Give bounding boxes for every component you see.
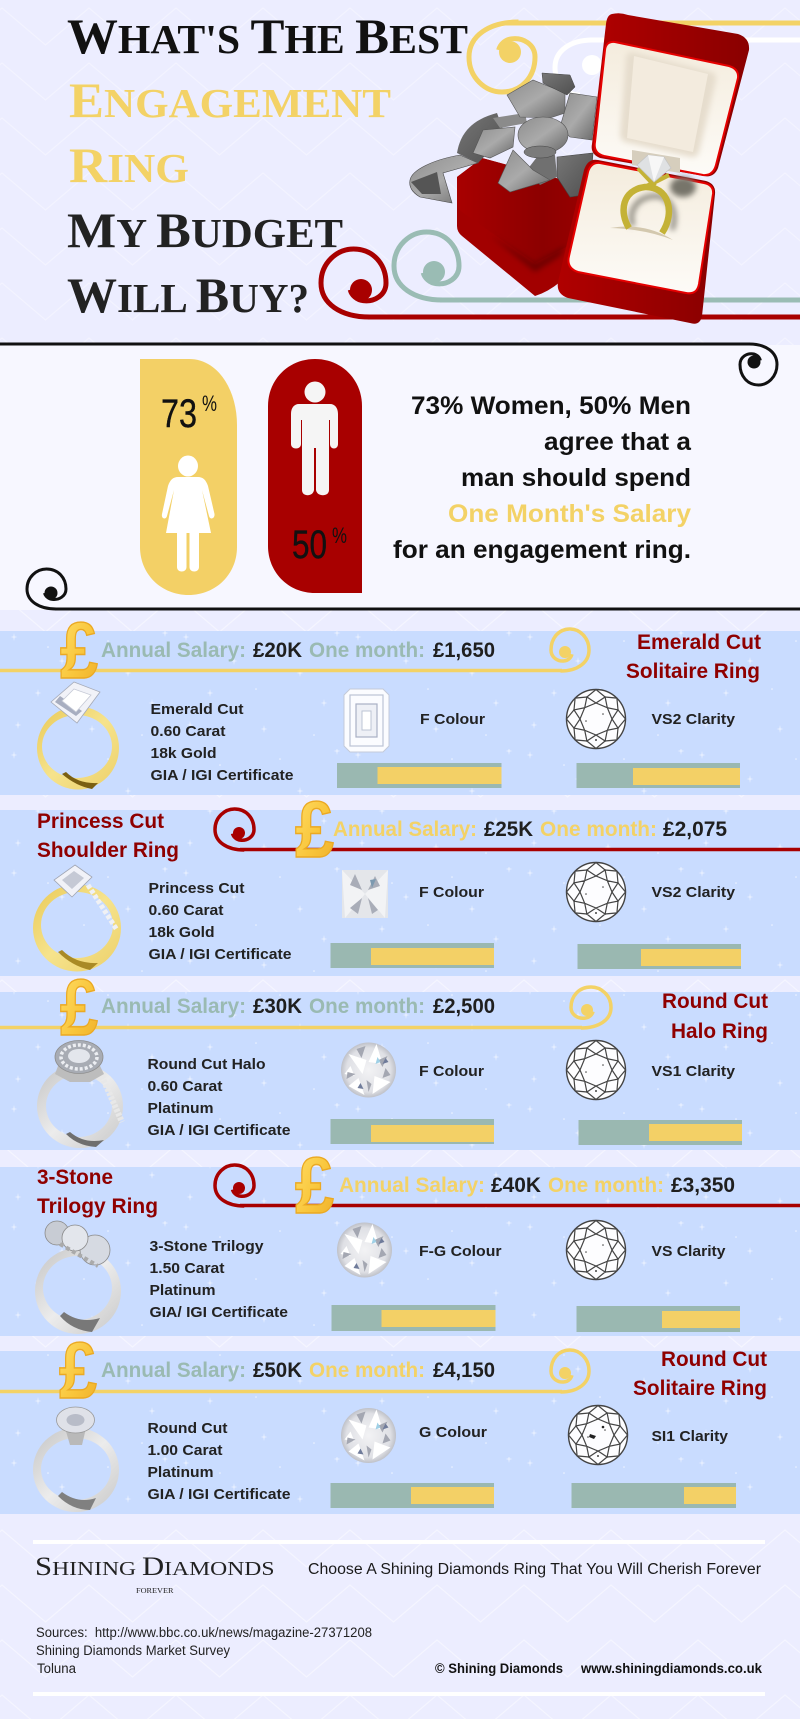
ring name <box>662 990 768 1043</box>
icon: round brilliant diamond <box>341 1408 396 1463</box>
band background <box>0 1351 800 1514</box>
copyright and website: www.shiningdiamonds.co.uk <box>580 1661 762 1676</box>
clarity bar <box>576 763 740 788</box>
clarity label: VS2 Clarity <box>652 711 736 728</box>
ring name <box>626 631 761 683</box>
statistic text: for an engagement ring. <box>393 536 691 564</box>
salary text: £20K <box>253 639 302 662</box>
icon: man <box>291 382 338 495</box>
icon: pound: £ <box>59 1326 97 1415</box>
bottom black scroll <box>27 569 800 609</box>
statistic text <box>393 392 692 564</box>
ring name <box>633 1348 767 1400</box>
clarity bar <box>572 1483 736 1508</box>
50 percent: % <box>332 523 347 548</box>
red scroll line <box>215 809 800 850</box>
icon: clarity diagram <box>566 690 626 748</box>
salary text: One month: <box>548 1174 664 1197</box>
logo: Shining Diamonds <box>35 1552 274 1595</box>
panel: emerald cut solitaire ring <box>0 606 800 795</box>
ring specification: Round Cut Halo <box>148 1056 266 1073</box>
panel: round cut halo ring <box>0 963 800 1150</box>
ring specification: 18k Gold <box>150 745 216 762</box>
ring name <box>37 1166 158 1218</box>
salary text <box>101 1359 495 1382</box>
footer rule top <box>33 1540 765 1544</box>
colour bar <box>337 763 502 788</box>
decorative gold scroll <box>469 22 800 92</box>
icon: clarity diagram <box>566 1040 626 1100</box>
ring specification <box>150 1238 288 1321</box>
salary text: One month: <box>309 639 425 662</box>
ring specification: 1.50 Carat <box>150 1260 224 1277</box>
ring name: Solitaire Ring <box>633 1377 767 1400</box>
salary text: One month: <box>309 995 425 1018</box>
ring name: 3-Stone <box>37 1166 113 1189</box>
statistic text: 73% Women, 50% Men <box>411 392 691 420</box>
salary text: £40K <box>491 1174 541 1197</box>
panel: footer <box>33 1540 765 1696</box>
ring specification: 3-Stone Trilogy <box>150 1238 264 1255</box>
colour label: F-G Colour <box>419 1243 502 1260</box>
gold scroll line <box>0 1350 589 1392</box>
statistic text: agree that a <box>544 428 692 456</box>
statistic text: man should spend <box>461 464 691 492</box>
salary text: Annual Salary: <box>333 818 477 841</box>
salary text <box>333 818 727 841</box>
colour bar <box>330 1483 494 1508</box>
copyright and website <box>435 1661 762 1676</box>
ring specification: GIA / IGI Certificate <box>148 1122 290 1139</box>
title: ENGAGEMENT <box>69 72 391 128</box>
icon: gold emerald cut ring <box>37 682 119 790</box>
salary text: £1,650 <box>433 639 495 662</box>
icon: platinum halo ring <box>37 1040 123 1148</box>
73 percent: % <box>202 391 217 416</box>
colour label: F Colour <box>420 711 485 728</box>
ring specification: 18k Gold <box>148 924 214 941</box>
icon: platinum solitaire ring <box>33 1407 119 1512</box>
ring specification <box>148 880 292 963</box>
icon: round brilliant diamond <box>341 1042 396 1098</box>
title <box>67 8 468 323</box>
salary text <box>101 995 495 1018</box>
panel background <box>0 345 800 610</box>
icon: pound: £ <box>60 606 98 695</box>
salary text: Annual Salary: <box>339 1174 485 1197</box>
icon: clarity diagram with inclusions <box>568 1406 628 1464</box>
salary text: Annual Salary: <box>101 639 246 662</box>
salary text: Annual Salary: <box>101 995 246 1018</box>
ring specification: GIA / IGI Certificate <box>150 767 294 784</box>
salary text: One month: <box>540 818 657 841</box>
ring name: Round Cut <box>661 1348 767 1371</box>
sources: Sources: http://www.bbc.co.uk/news/magazine-27371208 <box>36 1625 372 1640</box>
salary text: Annual Salary: <box>101 1359 246 1382</box>
gold scroll line <box>0 987 611 1028</box>
band background <box>0 810 800 976</box>
salary text: £25K <box>484 818 533 841</box>
copyright and website: © Shining Diamonds <box>435 1661 563 1676</box>
ring specification: GIA / IGI Certificate <box>148 1486 290 1503</box>
ring specification: 0.60 Carat <box>148 1078 222 1095</box>
gold scroll line <box>0 629 589 671</box>
title: MY BUDGET <box>67 202 343 258</box>
ring specification <box>148 1056 290 1139</box>
clarity bar <box>576 1306 740 1332</box>
icon: woman <box>162 456 215 572</box>
ring specification: 0.60 Carat <box>148 902 224 919</box>
band background <box>0 631 800 795</box>
ring specification: Princess Cut <box>148 880 245 897</box>
icon: open ring box <box>558 13 749 324</box>
icon: clarity diagram <box>566 862 626 922</box>
ring specification <box>150 701 294 784</box>
icon: pound: £ <box>295 785 334 874</box>
salary text: £3,350 <box>671 1174 735 1197</box>
band background <box>0 1167 800 1336</box>
colour bar <box>330 943 494 968</box>
chevron pattern: footer <box>0 610 800 1719</box>
sources: Shining Diamonds Market Survey <box>36 1643 230 1658</box>
ring name: Trilogy Ring <box>37 1195 158 1218</box>
top black scroll <box>0 344 777 385</box>
icon: pound: £ <box>60 963 98 1052</box>
icon: princess cut diamond <box>342 870 388 918</box>
panel: survey statistic <box>0 344 800 610</box>
icon: pound: £ <box>295 1141 334 1230</box>
logo: Shining Diamonds: SHINING DIAMONDS <box>35 1552 274 1581</box>
colour label: F Colour <box>419 884 484 901</box>
ring specification: Platinum <box>150 1282 216 1299</box>
title: WHAT'S THE BEST <box>67 8 468 64</box>
ring name: Solitaire Ring <box>626 660 760 683</box>
women statistic pill <box>140 359 237 595</box>
sources: Toluna <box>37 1661 76 1676</box>
ring name <box>37 810 179 862</box>
salary text: £4,150 <box>433 1359 495 1382</box>
salary text: £30K <box>253 995 302 1018</box>
clarity label: VS1 Clarity <box>652 1063 736 1080</box>
clarity label: VS2 Clarity <box>652 884 736 901</box>
decorative teal scroll <box>394 232 800 300</box>
ring specification: GIA/ IGI Certificate <box>150 1304 288 1321</box>
icon: clarity diagram <box>566 1220 626 1280</box>
salary text <box>339 1174 735 1197</box>
ring specification: Round Cut <box>148 1420 228 1437</box>
ring specification: Platinum <box>148 1100 214 1117</box>
50 percent: 50 <box>292 523 327 567</box>
title: RING <box>69 137 189 193</box>
colour label: G Colour <box>419 1424 487 1441</box>
ring specification: Emerald Cut <box>150 701 244 718</box>
73 percent: 73 <box>161 392 197 436</box>
salary text: £50K <box>253 1359 302 1382</box>
sources <box>36 1625 372 1676</box>
salary text: £2,075 <box>663 818 727 841</box>
ring specification: Platinum <box>148 1464 214 1481</box>
colour bar <box>332 1305 496 1331</box>
red scroll line <box>215 1165 800 1206</box>
clarity bar <box>578 944 741 969</box>
panel: 3-stone trilogy ring <box>0 1141 800 1336</box>
tagline: Choose A Shining Diamonds Ring That You Will Cherish Forever <box>308 1561 761 1578</box>
clarity bar <box>578 1120 742 1145</box>
ring specification: 1.00 Carat <box>148 1442 222 1459</box>
ring specification: GIA / IGI Certificate <box>148 946 292 963</box>
statistic text: One Month's Salary <box>448 500 691 528</box>
ring name: Princess Cut <box>37 810 164 833</box>
icon: emerald cut diamond <box>344 689 389 752</box>
decorative red scroll <box>321 249 800 317</box>
ring specification <box>148 1420 290 1503</box>
title: WILL BUY? <box>67 267 309 323</box>
colour label: F Colour <box>419 1063 484 1080</box>
icon: red gift box with grey bow <box>410 73 600 296</box>
clarity label: SI1 Clarity <box>652 1428 729 1445</box>
panel: princess cut shoulder ring <box>0 785 800 976</box>
icon: platinum trilogy ring <box>35 1221 121 1334</box>
icon: round brilliant diamond <box>337 1222 392 1278</box>
chevron pattern: header <box>0 0 800 345</box>
salary text: One month: <box>309 1359 425 1382</box>
ring name: Emerald Cut <box>637 631 761 654</box>
panel: round cut solitaire ring <box>0 1326 800 1514</box>
icon: gold princess cut ring <box>33 865 121 972</box>
ring name: Shoulder Ring <box>37 839 179 862</box>
ring name: Halo Ring <box>671 1020 768 1043</box>
logo: Shining Diamonds: FOREVER <box>136 1586 174 1595</box>
decorative white scroll <box>555 40 800 95</box>
band background <box>0 992 800 1150</box>
men statistic pill <box>268 359 362 593</box>
ring name: Round Cut <box>662 990 768 1013</box>
footer rule bottom <box>33 1692 765 1696</box>
salary text <box>101 639 495 662</box>
colour bar <box>330 1119 494 1144</box>
header panel <box>67 8 800 324</box>
clarity label: VS Clarity <box>652 1243 726 1260</box>
salary text: £2,500 <box>433 995 495 1018</box>
ring specification: 0.60 Carat <box>150 723 226 740</box>
